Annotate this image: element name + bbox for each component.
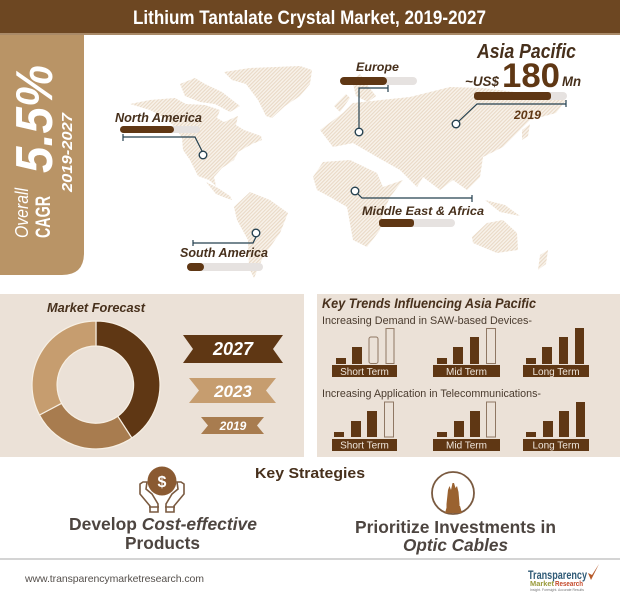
bar chart: SAW short term [332, 328, 397, 378]
ribbon: 2023 [189, 378, 276, 403]
footer url: www.transparencymarketresearch.com [24, 573, 204, 585]
icon: optic cable [432, 472, 474, 514]
bar chart: SAW mid term: Mid Term [446, 367, 487, 378]
region: North America [115, 111, 207, 159]
region: Middle East and Africa: Middle East & Africa [362, 204, 484, 218]
donut chart [32, 321, 160, 449]
region: Asia Pacific: 180 [502, 57, 560, 95]
ribbon: 2027: 2027 [212, 339, 254, 359]
footer rule [0, 558, 620, 560]
bar chart: SAW long term: Long Term [532, 367, 580, 378]
ribbon: 2027 [183, 335, 283, 363]
title: Lithium Tantalate Crystal Market, 2019-2027 [133, 8, 486, 29]
region: South America: South America [180, 246, 268, 260]
bar chart: telecom long term: Long Term [532, 440, 580, 452]
ribbon: 2023: 2023 [213, 382, 252, 401]
panel: overall CAGR: Overall [12, 187, 32, 238]
region: Europe [340, 62, 417, 136]
bar chart: telecom long term [523, 402, 589, 452]
icon: hands holding coin: $ [158, 474, 167, 491]
region: Asia Pacific: 2019 [513, 108, 541, 122]
region: Asia Pacific: ~US$ [465, 73, 499, 89]
bar chart: SAW short term: Short Term [340, 367, 389, 378]
logo: Insight. Foresight. Accurate Results [530, 588, 584, 592]
panel: overall CAGR: 5.5% [6, 65, 64, 173]
heading: market forecast: Market Forecast [47, 301, 146, 315]
ribbon: 2019: 2019 [219, 419, 247, 433]
strategy: cost-effective products: Develop Cost-effective [69, 514, 257, 534]
panel: overall CAGR: 2019-2027 [59, 112, 76, 193]
panel: overall CAGR: CAGR [32, 196, 55, 238]
bar chart: SAW mid term [433, 328, 500, 378]
region: Middle East and Africa [351, 187, 484, 227]
heading: key trends: Key Trends Influencing Asia Pacific [322, 296, 536, 311]
bar chart: SAW long term [523, 328, 589, 378]
strategy: optic cables: Prioritize Investments in [355, 517, 556, 537]
region: Asia Pacific [452, 41, 581, 128]
icon: hands holding coin [140, 466, 184, 512]
region: Asia Pacific: Asia Pacific [476, 41, 576, 63]
region: Europe: Europe [356, 62, 400, 74]
strategy: optic cables [355, 517, 556, 555]
region: Asia Pacific: Mn [562, 73, 581, 89]
logo: Market [530, 581, 555, 588]
panel: market forecast [0, 294, 304, 457]
heading: key strategies: Key Strategies [255, 465, 365, 482]
bar chart: telecom mid term: Mid Term [446, 440, 487, 452]
subheading: telecommunications: Increasing Application in Telecommunications- [322, 388, 541, 400]
region: North America: North America [115, 111, 202, 125]
bar chart: telecom short term: Short Term [340, 440, 389, 452]
subheading: SAW devices: Increasing Demand in SAW-based Devices- [322, 315, 532, 327]
strategy: cost-effective products: Products [125, 533, 200, 553]
ribbon: 2019 [201, 417, 264, 434]
region: South America [180, 229, 268, 271]
panel: overall CAGR [0, 35, 84, 275]
panel: key trends [317, 294, 620, 457]
logo [528, 564, 599, 592]
strategy: optic cables: Optic Cables [403, 535, 508, 555]
world map [130, 66, 566, 278]
bar chart: telecom short term [332, 402, 397, 452]
logo: Transparency [528, 570, 587, 582]
strategy: cost-effective products [69, 514, 257, 553]
logo: Research [555, 581, 583, 588]
header banner [0, 0, 620, 35]
bar chart: telecom mid term [433, 402, 500, 452]
